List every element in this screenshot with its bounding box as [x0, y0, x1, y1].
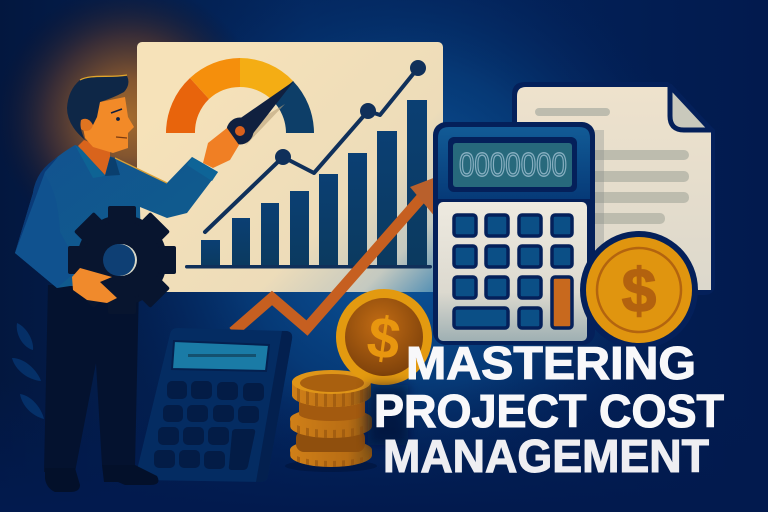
- title: [374, 337, 724, 482]
- decorative plant leaves: [12, 323, 44, 419]
- top coin: [292, 370, 371, 407]
- shirt: [15, 145, 218, 288]
- bottom coin: [290, 439, 372, 467]
- tilted dollar coin: $: [363, 304, 404, 373]
- main calculator: [433, 122, 595, 345]
- coin stack: [285, 370, 377, 472]
- gauge needle: [226, 81, 294, 146]
- title: PROJECT COST: [374, 385, 724, 437]
- trousers: [44, 285, 139, 472]
- calculator display: 0000000: [459, 146, 567, 183]
- document: [512, 82, 715, 320]
- title: MANAGEMENT: [383, 430, 709, 482]
- rising orange arrow: [233, 177, 436, 332]
- bar chart: [185, 100, 432, 268]
- document text lines: [535, 108, 689, 224]
- title: MASTERING: [406, 337, 696, 389]
- shirt collar: [75, 145, 120, 178]
- hand on gear: [72, 268, 117, 303]
- calculator display: [448, 137, 577, 192]
- lower spacer: [296, 430, 365, 452]
- shoes: [45, 465, 158, 492]
- dark calculator: [136, 328, 292, 482]
- dashboard panel: [137, 42, 443, 292]
- face: [82, 97, 134, 153]
- dark calculator keys: [154, 381, 264, 470]
- tilted dollar coin: [336, 289, 432, 385]
- large gold coin: $: [622, 257, 656, 326]
- shirt arm shading: [15, 173, 80, 288]
- dark calculator display: [172, 341, 269, 371]
- title shadow: [368, 385, 408, 445]
- calculator keys: [454, 215, 572, 328]
- trend line: [205, 60, 426, 232]
- middle coin: [290, 408, 372, 438]
- neck: [78, 140, 110, 175]
- gauge: [166, 58, 314, 133]
- gear: [68, 206, 176, 314]
- upper spacer: [299, 398, 365, 421]
- man with gear: [15, 75, 239, 492]
- raised hand: [203, 128, 239, 168]
- hair: [67, 76, 128, 140]
- large gold coin: [580, 231, 698, 349]
